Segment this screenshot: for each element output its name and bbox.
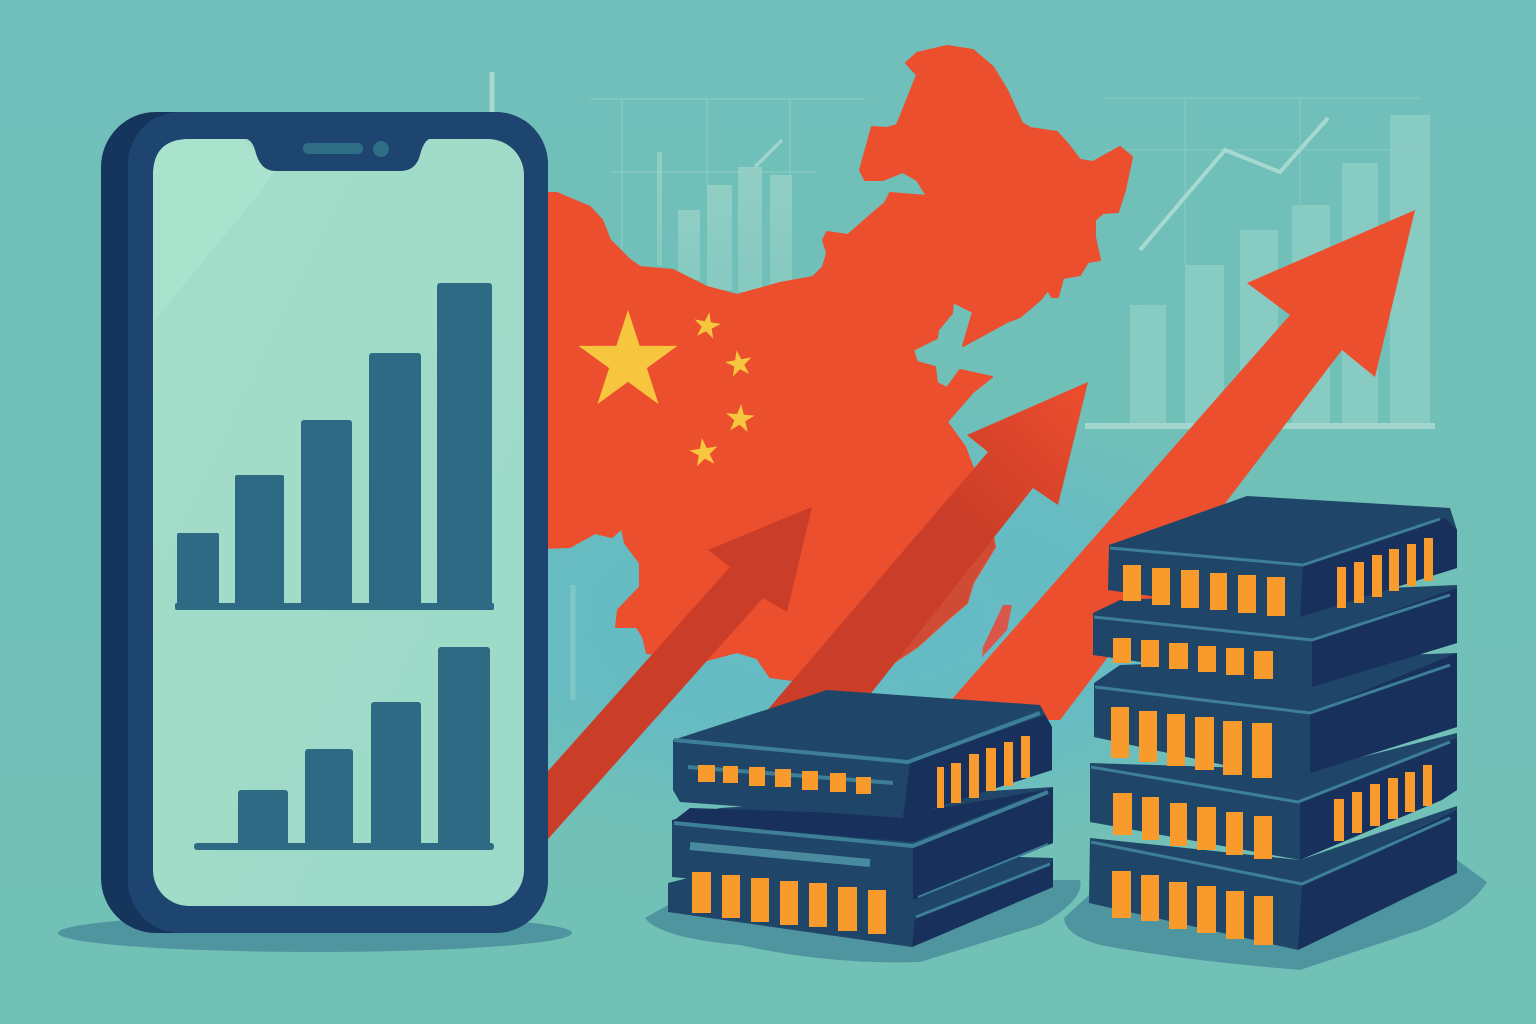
phone screen	[153, 139, 524, 906]
left server slots: lower row	[692, 872, 886, 934]
lower bar chart	[194, 647, 494, 850]
flag star: small 4	[688, 436, 720, 467]
left server unit 1	[673, 690, 1052, 818]
camera	[373, 141, 389, 157]
background chart: right	[1085, 98, 1435, 426]
shaded southern coast	[858, 537, 995, 690]
island	[982, 605, 1012, 657]
flag star: large	[579, 310, 677, 404]
arrow: first	[540, 507, 812, 848]
side vents	[937, 736, 1030, 808]
left server unit 3	[668, 850, 1053, 947]
upper bar chart	[175, 283, 494, 610]
speaker	[303, 143, 363, 154]
background chart: left	[492, 72, 865, 700]
right server unit 1	[1108, 496, 1457, 617]
left server shadow	[645, 880, 1080, 962]
right server shadow	[1064, 860, 1487, 970]
indicator strip	[688, 767, 893, 783]
indicator lights	[698, 765, 871, 794]
flag star: small 3	[725, 403, 756, 432]
right server unit 3	[1094, 653, 1457, 778]
right server unit 2	[1093, 585, 1457, 687]
map of China	[540, 46, 1132, 690]
arrow: third, largest	[945, 210, 1415, 720]
flag star: small 2	[723, 348, 754, 377]
phone body	[101, 112, 548, 933]
right server unit 5	[1089, 806, 1457, 950]
right server unit 4	[1090, 733, 1457, 860]
arrow: second	[760, 382, 1088, 720]
screen glare	[153, 139, 275, 322]
right server stack	[1089, 496, 1457, 950]
notch	[243, 138, 432, 171]
flag star: small 1	[692, 310, 723, 339]
smartphone	[101, 112, 548, 933]
phone shadow	[58, 914, 572, 952]
left server stack	[668, 690, 1053, 947]
label strip	[690, 846, 870, 863]
left server unit 2	[672, 787, 1053, 900]
